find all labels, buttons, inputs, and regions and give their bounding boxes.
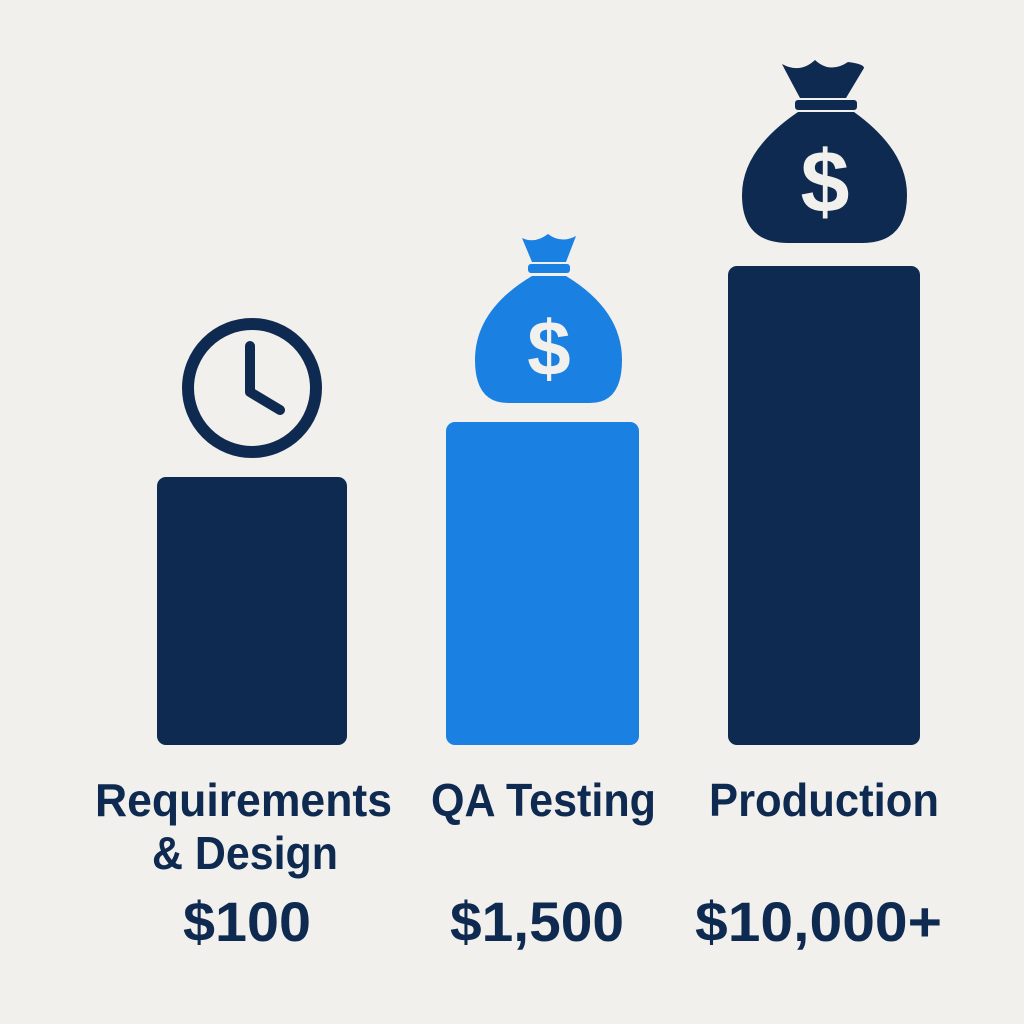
price: $100: $100: [183, 890, 311, 953]
label: requirements & design: Requirements: [95, 774, 392, 826]
icon: money bag blue: [475, 234, 622, 403]
icon: money bag dark: [742, 60, 907, 243]
icon: clock: [188, 324, 316, 452]
labels: [95, 774, 942, 953]
label: requirements & design: [95, 774, 392, 879]
icon: money bag blue: $: [527, 304, 571, 392]
label: requirements & design: & Design: [152, 827, 338, 879]
price: $10,000+: $10,000+: [695, 890, 942, 953]
bar: requirements & design: [157, 477, 347, 745]
label: qa testing: QA Testing: [431, 774, 656, 826]
price: $1,500: $1,500: [450, 890, 624, 953]
bar: production: [728, 266, 920, 745]
bar: qa testing: [446, 422, 639, 745]
label: production: Production: [709, 774, 939, 826]
icon: money bag dark: $: [801, 132, 849, 231]
